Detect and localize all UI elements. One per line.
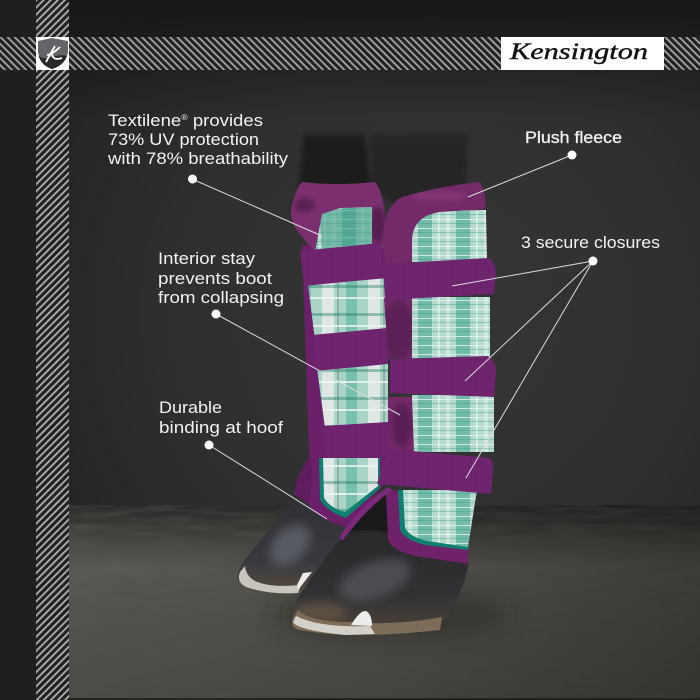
hoof shadow: [270, 591, 510, 639]
vertical stripe band: [36, 0, 69, 700]
front boot plaid panels: [408, 210, 487, 262]
callout: Textilene: with 78% breathability: [107, 149, 289, 168]
callout lines: [192, 155, 593, 519]
icon: K shield logo: [36, 37, 69, 70]
front boot lower binding and panel: [386, 490, 470, 564]
callout: Textilene: provides: [188, 111, 263, 130]
rear boot straps: [300, 243, 383, 286]
callout: Textilene: 73% UV protection: [108, 130, 259, 149]
brand logo: Kensington: Kensington: [509, 39, 648, 64]
callout: Interior stay: prevents boot: [158, 269, 272, 288]
callout dots: [188, 150, 598, 450]
callout: Durable binding: [159, 398, 283, 437]
callout: Durable binding: binding at hoof: [159, 418, 283, 437]
rear hoof: [238, 500, 345, 594]
callout: Interior stay: from collapsing: [158, 288, 284, 307]
callout: Durable binding: Durable: [159, 398, 222, 417]
callout: Textilene: Textilene: [108, 111, 175, 130]
boot: front leg: [339, 182, 496, 564]
callout: Interior stay: Interior stay: [158, 249, 256, 268]
brand logo: Kensington: [501, 37, 664, 70]
front hoof: [292, 490, 469, 635]
callout: 3 secure closures: 3 secure closures: [521, 233, 660, 252]
horizontal stripe band: [0, 37, 700, 70]
rear boot body: [302, 245, 388, 527]
front boot fleece: [383, 182, 485, 452]
strap 1: [383, 258, 496, 300]
rear boot fleece: [291, 182, 386, 252]
strap 3: [377, 449, 493, 494]
boot: rear leg: [291, 182, 388, 527]
horse legs: [298, 135, 468, 205]
strap 2: [390, 356, 496, 397]
callout: Plush fleece: Plush fleece: [525, 128, 622, 147]
callout: Textilene: ®: [181, 113, 188, 122]
rear boot plaid panels: [308, 278, 388, 428]
callout: Interior stay: [158, 249, 284, 307]
callout: Textilene: [107, 111, 289, 168]
floor: [69, 505, 700, 700]
